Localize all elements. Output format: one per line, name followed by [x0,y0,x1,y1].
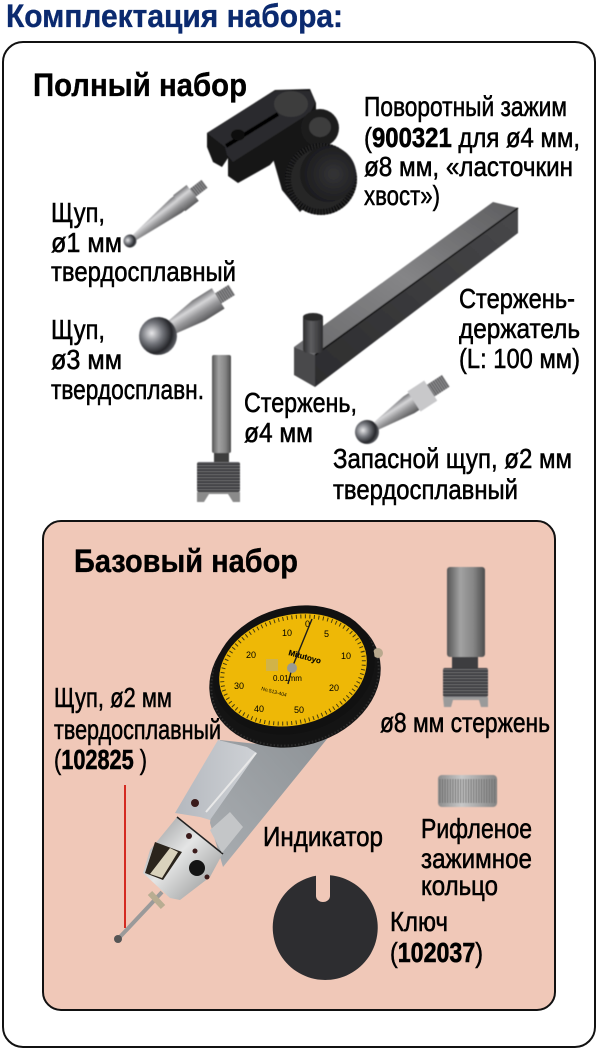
knurled ring label: кольцо [421,870,498,901]
clamp label: (900321 для ø4 мм, [364,122,580,153]
red pointer line [124,785,126,928]
dial numbers: 10 [282,628,292,638]
icon: 4 mm stem [197,355,240,502]
indicator head [143,817,223,900]
8 mm stem label: ø8 мм стержень [380,707,550,738]
dial numbers: 0 [305,619,310,629]
icon: wrench disc [273,875,378,980]
holder bar label [459,283,580,374]
spare probe label: Запасной щуп, ø2 мм [333,443,572,474]
basic probe label: (102825 ) [54,744,147,775]
icon: holder bar [294,202,518,387]
3 mm probe label: Щуп, [51,314,105,345]
icon: dial indicator [114,587,397,943]
dial needle [288,619,312,684]
clamp label: хвост») [364,180,440,211]
4 mm stem label: Стержень, [244,387,357,418]
clamp label: ø8 мм, «ласточкин [364,151,573,182]
knurled ring label: Рифленое [421,813,532,844]
dial numbers: 0.01mm [273,674,302,683]
dial numbers: 20 [246,650,256,660]
1 mm probe label: твердосплавный [51,256,236,287]
basic set frame [43,521,555,1010]
icon: 1 mm probe [119,176,211,253]
dial bezel [193,589,397,767]
dial numbers: 40 [254,704,264,714]
icon: 3 mm probe [132,274,242,362]
3 mm probe label: ø3 мм [51,344,122,375]
dial numbers [234,619,351,715]
stylus [118,892,162,939]
dial numbers: Mitutoyo [287,648,322,666]
clamp label [364,91,580,211]
basic probe label: твердосплавный [54,714,221,745]
dial numbers: No.513-404 [260,686,287,699]
indicator plate [175,740,257,820]
dial numbers: 50 [294,705,304,715]
dial numbers: 30 [234,681,244,691]
dial numbers: 20 [329,683,339,693]
wrench label [390,906,483,968]
indicator body [210,723,340,867]
3 mm probe label [51,314,204,405]
spare probe label: твердосплавный [333,474,518,505]
4 mm stem label: ø4 мм [244,417,313,448]
spare probe label [333,443,572,505]
dial numbers: 10 [341,651,351,661]
holder bar label: (L: 100 мм) [459,343,580,374]
4 mm stem label [244,387,357,448]
1 mm probe label: Щуп, [51,197,105,228]
basic probe label [54,682,221,775]
indicator label: Индикатор [263,821,383,852]
knurled ring label [421,813,532,901]
icon: 8 mm stem [443,567,488,707]
holder bar label: Стержень- [459,283,575,314]
dial face [206,597,380,743]
1 mm probe label: ø1 мм [51,227,122,258]
icon: knurled ring [438,775,497,807]
dial numbers: 5 [324,629,329,639]
wrench label: Ключ [390,906,448,937]
basic set heading: Базовый набор [74,543,298,579]
holder bar label: держатель [459,313,580,344]
wrench label: (102037) [390,937,483,968]
full set heading: Полный набор [33,67,247,103]
knurled ring label: зажимное [421,843,532,874]
icon: spare probe [350,371,452,449]
3 mm probe label: твердосплавн. [51,374,204,405]
probe opening [145,842,182,880]
basic probe label: Щуп, ø2 мм [54,682,172,713]
1 mm probe label [51,197,236,287]
icon: swivel clamp [207,89,357,215]
panel: basic set [43,521,555,1010]
